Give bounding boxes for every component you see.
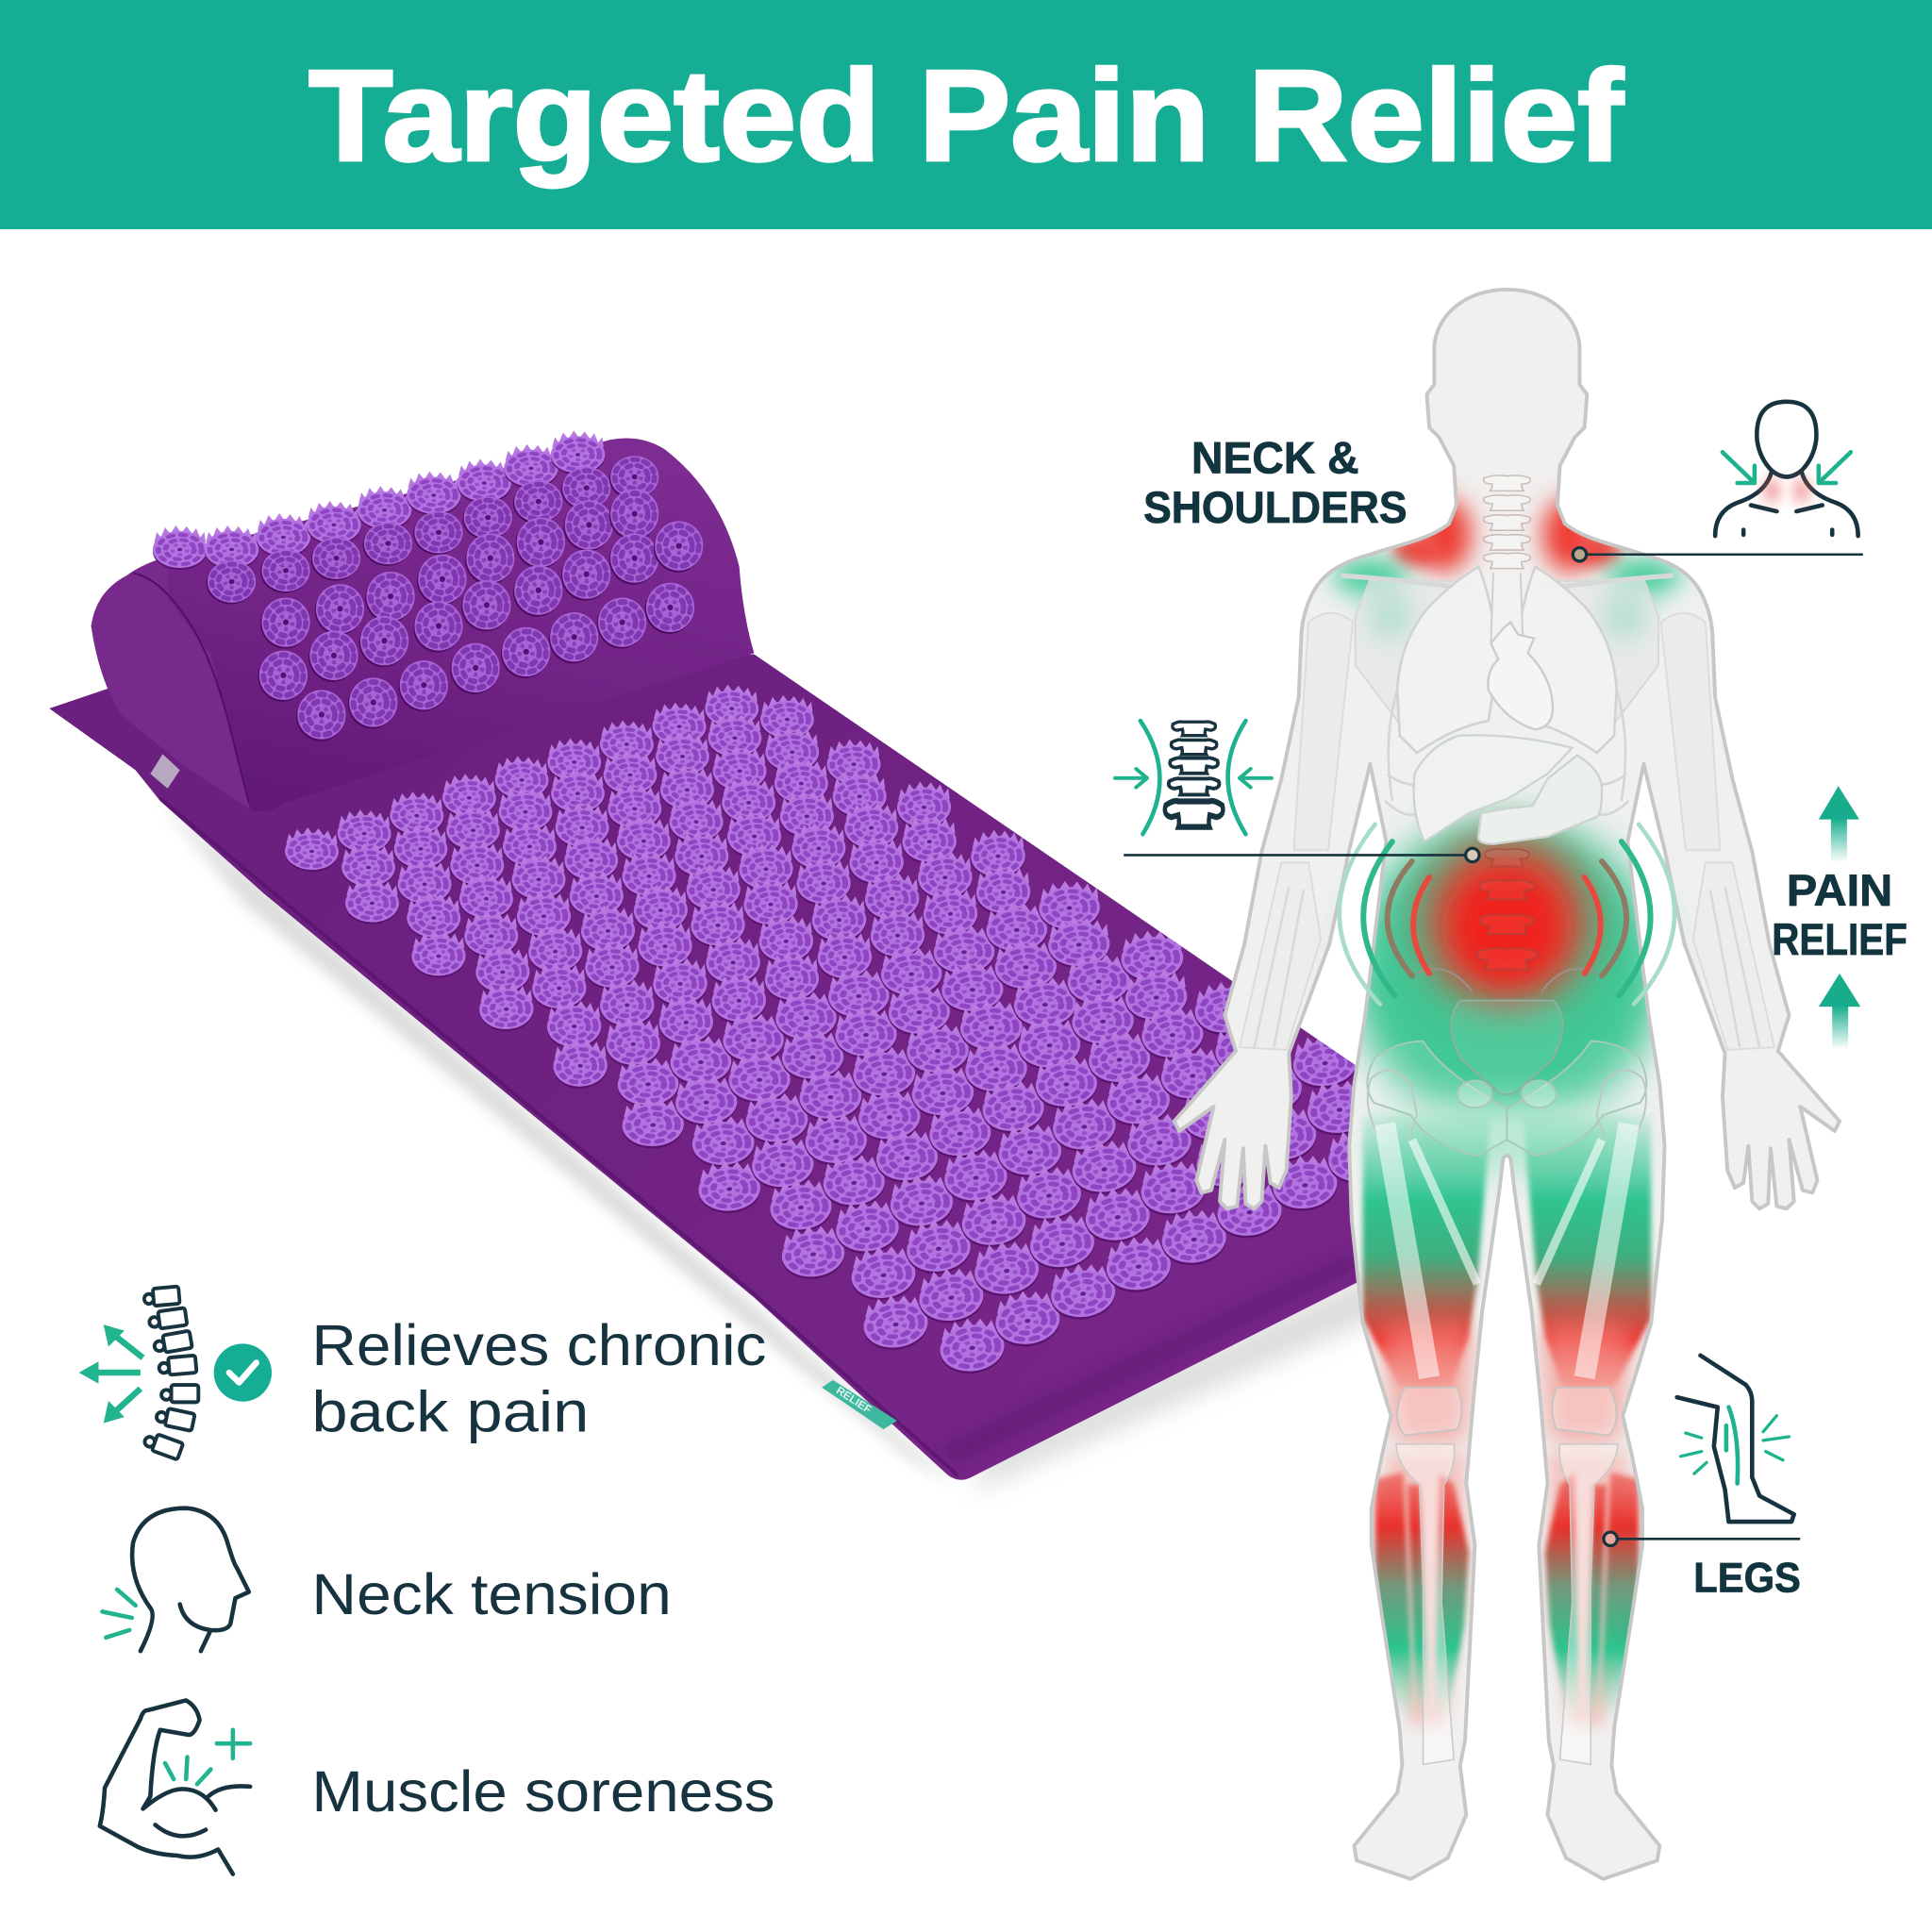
icon: neck and shoulders head [1715,402,1858,536]
brand tag [822,1380,897,1429]
pain wave arcs around lower back [1340,824,1674,1004]
icon: flexed arm [100,1700,250,1874]
callout: pain relief with arrows [1772,786,1907,1050]
benefit: chronic back pain [79,1287,766,1459]
title banner [0,0,1932,229]
skeleton and organs [1240,475,1774,1764]
benefit: muscle soreness [100,1700,775,1874]
benefit: chronic back pain: back pain [311,1380,589,1445]
callout: neck and shoulders label: NECK & [1191,433,1359,483]
benefit: muscle soreness: Muscle soreness [311,1759,775,1824]
mat acupressure discs [285,679,1448,1375]
arrow up [1819,786,1859,862]
body heat glow zones [1333,498,1681,1738]
callout: pain relief with arrows: RELIEF [1772,914,1907,964]
pillow acupressure discs [153,430,703,741]
leader line: lower back [1124,848,1479,862]
arrow up lower [1819,974,1860,1050]
icon: spine with arrows and check [79,1287,272,1459]
title: Targeted Pain Relief [308,44,1624,189]
icon: leg [1677,1356,1794,1522]
benefit: chronic back pain: Relieves chronic [311,1313,766,1378]
callout: legs label: LEGS [1693,1556,1801,1602]
leader line: neck [1573,548,1863,561]
anatomical body figure [1174,290,1840,1879]
heart [1488,623,1553,729]
sacrum [1451,1001,1563,1094]
product: acupressure pillow [92,430,754,811]
leader line: legs [1604,1532,1800,1546]
stomach [1478,756,1602,844]
icon: head profile [102,1508,249,1651]
product: acupressure mat [49,655,1448,1491]
liver [1414,735,1573,841]
callout: neck and shoulders label [1143,433,1407,532]
benefit: neck tension: Neck tension [311,1562,672,1627]
icon: lumbar spine compression [1115,721,1272,834]
brand tag: RELIEF [834,1385,874,1416]
callout: neck and shoulders label: SHOULDERS [1143,482,1407,532]
callout: pain relief with arrows: PAIN [1787,865,1892,915]
benefit: neck tension [102,1508,672,1651]
